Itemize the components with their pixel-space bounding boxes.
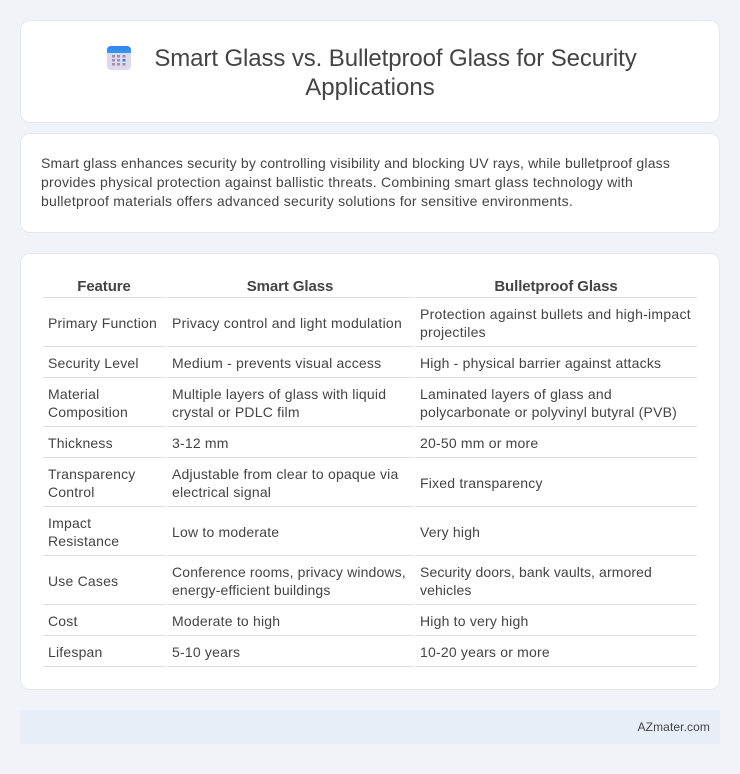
- table header: Feature: [77, 278, 131, 295]
- row: security level: High - physical barrier against attacks: [420, 355, 661, 371]
- row: cost: [48, 613, 528, 629]
- row: use cases: vehicles: [420, 582, 471, 598]
- row: lifespan: 10-20 years or more: [420, 644, 550, 660]
- row: transparency control: Transparency: [48, 466, 135, 482]
- icon: calendar: [107, 46, 131, 70]
- row: transparency control: Fixed transparency: [420, 475, 543, 491]
- row: security level: Medium - prevents visual access: [172, 355, 381, 371]
- row: lifespan: [48, 644, 550, 660]
- row: impact resistance: [48, 515, 480, 549]
- panel: comparison table: [20, 253, 720, 690]
- row: use cases: energy-efficient buildings: [172, 582, 331, 598]
- row: cost: Moderate to high: [172, 613, 280, 629]
- summary text: [41, 155, 670, 209]
- comparison table: [43, 278, 697, 667]
- row: transparency control: Control: [48, 484, 95, 500]
- row: material composition: polycarbonate or polyvinyl butyral (PVB): [420, 404, 677, 420]
- row: impact resistance: Very high: [420, 524, 480, 540]
- row: impact resistance: Impact: [48, 515, 91, 531]
- summary text: provides physical protection against ballistic threats. Combining smart glass technology with: [41, 174, 633, 190]
- panel: summary: [20, 133, 720, 233]
- row: impact resistance: Low to moderate: [172, 524, 279, 540]
- row: transparency control: [48, 466, 543, 500]
- footer credit: AZmater.com: [638, 720, 710, 734]
- table header: Smart Glass: [247, 278, 333, 295]
- row: material composition: Composition: [48, 404, 128, 420]
- row: lifespan: 5-10 years: [172, 644, 240, 660]
- row: primary function: projectiles: [420, 324, 486, 340]
- row: transparency control: electrical signal: [172, 484, 271, 500]
- row: thickness: [48, 435, 538, 451]
- row: use cases: Conference rooms, privacy windows,: [172, 564, 406, 580]
- summary text: Smart glass enhances security by controlling visibility and blocking UV rays, while bulletproof glass: [41, 155, 670, 171]
- row: primary function: [48, 306, 691, 340]
- row: cost: High to very high: [420, 613, 528, 629]
- table header: [77, 278, 618, 295]
- row: material composition: [48, 386, 677, 420]
- panel: header: [20, 20, 720, 123]
- table header: Bulletproof Glass: [494, 278, 618, 295]
- footer bar: [20, 710, 720, 744]
- row: primary function: Protection against bullets and high-impact: [420, 306, 691, 322]
- row: material composition: Laminated layers of glass and: [420, 386, 612, 402]
- summary text: bulletproof materials offers advanced security solutions for sensitive environments.: [41, 193, 573, 209]
- title: Smart Glass vs. Bulletproof Glass for Security: [154, 45, 637, 72]
- row: impact resistance: Resistance: [48, 533, 119, 549]
- row: use cases: Security doors, bank vaults, armored: [420, 564, 652, 580]
- row: lifespan: Lifespan: [48, 644, 103, 660]
- row: thickness: 3-12 mm: [172, 435, 229, 451]
- row: thickness: 20-50 mm or more: [420, 435, 538, 451]
- row: cost: Cost: [48, 613, 78, 629]
- row: use cases: [48, 564, 652, 598]
- title: [154, 45, 637, 101]
- row: material composition: crystal or PDLC film: [172, 404, 300, 420]
- row: material composition: Material: [48, 386, 99, 402]
- row: security level: [48, 355, 661, 371]
- row: material composition: Multiple layers of glass with liquid: [172, 386, 386, 402]
- row: primary function: Primary Function: [48, 315, 157, 331]
- row: use cases: Use Cases: [48, 573, 118, 589]
- row: transparency control: Adjustable from clear to opaque via: [172, 466, 398, 482]
- title: Applications: [305, 74, 435, 101]
- row: thickness: Thickness: [48, 435, 113, 451]
- row: primary function: Privacy control and light modulation: [172, 315, 402, 331]
- row: security level: Security Level: [48, 355, 139, 371]
